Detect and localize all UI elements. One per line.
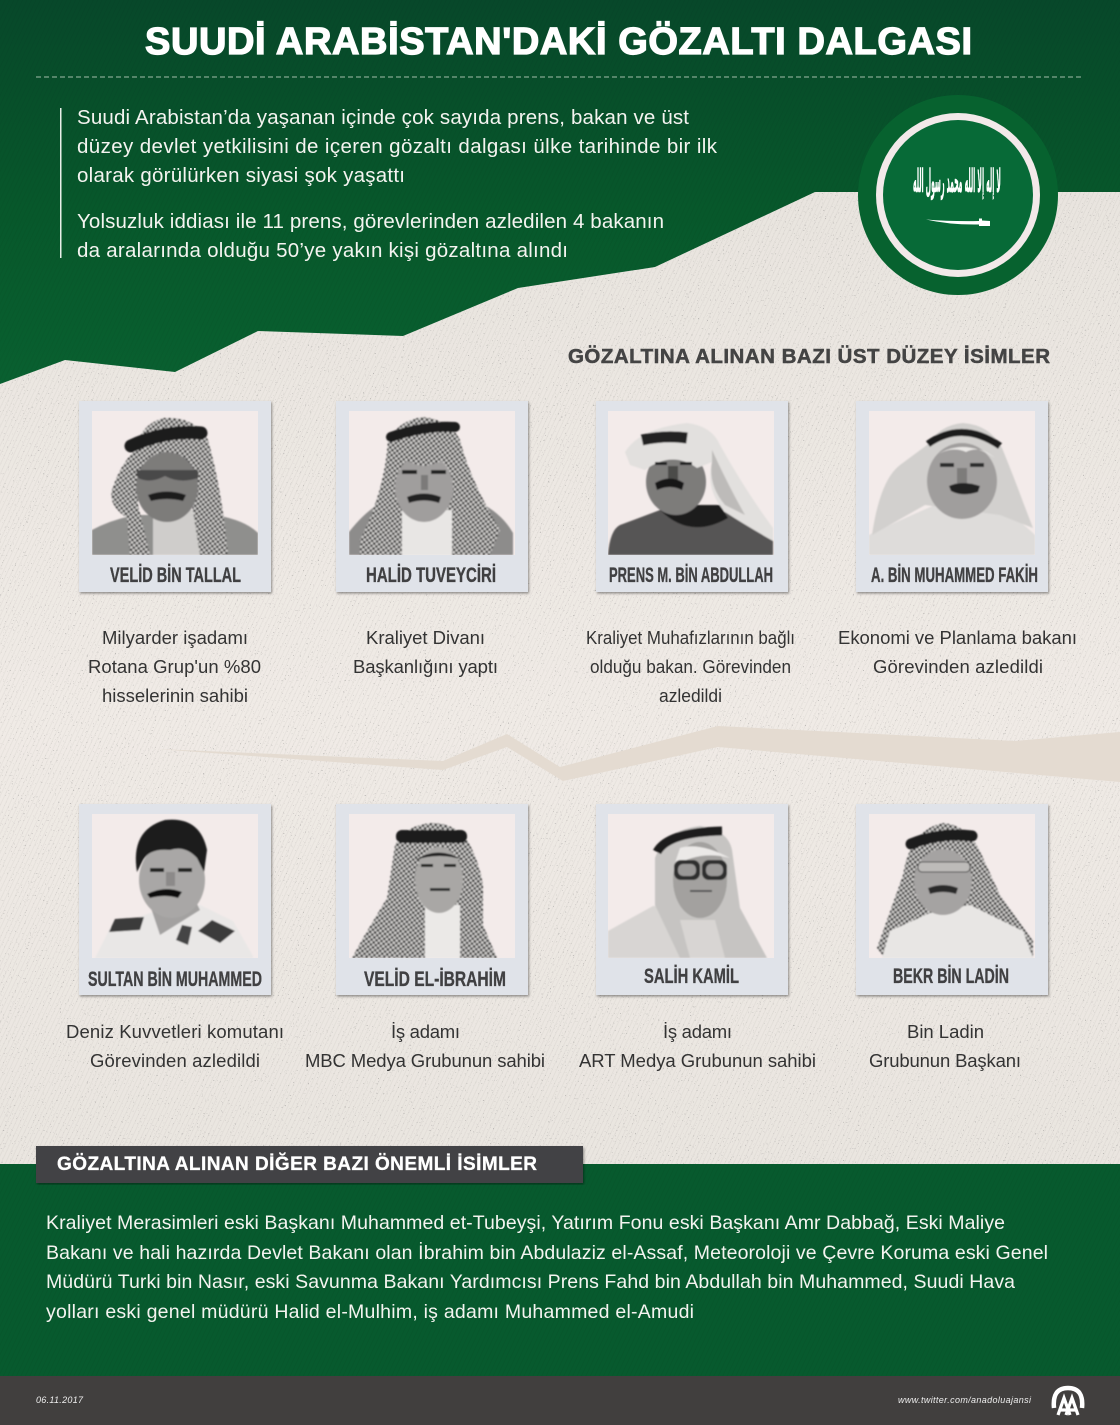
description: Salih Kamil: ART Medya Grubunun sahibi	[579, 1050, 816, 1071]
other names text: Müdürü Turki bin Nasır, eski Savunma Bakanı Yardımcısı Prens Fahd bin Abdullah bin Muhammed, Suudi Hava	[46, 1271, 1015, 1293]
intro text: Suudi Arabistan’da yaşanan içinde çok sayıda prens, bakan ve üst	[77, 106, 689, 129]
description: Prens M. bin Abdullah: azledildi	[659, 685, 722, 706]
card: Velid bin Tallal: VELİD BİN TALLAL	[110, 564, 241, 587]
portrait: Salih Kamil	[608, 826, 767, 958]
title divider	[36, 76, 1081, 78]
other names text: yolları eski genel müdürü Halid el-Mulhim, iş adamı Muhammed el-Amudi	[46, 1301, 694, 1323]
icon: Anadolu Agency logo	[1054, 1388, 1082, 1415]
other names text: Kraliyet Merasimleri eski Başkanı Muhammed et-Tubeyşi, Yatırım Fonu eski Başkanı Amr Dabbağ, Eski Maliye	[46, 1212, 1005, 1234]
card: Sultan bin Muhammed	[79, 804, 271, 995]
description: Prens M. bin Abdullah: olduğu bakan. Görevinden	[590, 656, 791, 677]
description: Salih Kamil: İş adamı	[663, 1021, 732, 1042]
description: Velid bin Tallal: hisselerinin sahibi	[102, 685, 248, 706]
description: Velid el-Ibrahim	[305, 1021, 545, 1071]
description: Halid Tuveyciri	[353, 627, 498, 677]
description: Halid Tuveyciri: Kraliyet Divanı	[366, 627, 485, 648]
card: Velid el-Ibrahim	[336, 804, 528, 995]
description: Bekr bin Ladin	[869, 1021, 1021, 1071]
footer	[0, 1376, 1120, 1425]
description: Velid el-Ibrahim: MBC Medya Grubunun sahibi	[305, 1050, 545, 1071]
portrait: Bekr bin Ladin	[877, 823, 1033, 958]
card: Velid el-Ibrahim: VELİD EL-İBRAHİM	[364, 968, 506, 991]
panel: other names	[0, 1146, 1120, 1376]
banner heading	[36, 1146, 583, 1183]
card: A. bin Muhammed Fakih	[856, 401, 1048, 592]
description: Velid bin Tallal: Rotana Grup'un %80	[88, 656, 261, 677]
description: Velid bin Tallal	[88, 627, 261, 706]
other names text: Bakanı ve hali hazırda Devlet Bakanı olan İbrahim bin Abdulaziz el-Assaf, Meteoroloji ve Çevre Koruma eski Genel	[46, 1241, 1048, 1264]
green header shape	[0, 0, 1120, 384]
description: Sultan bin Muhammed	[66, 1021, 284, 1071]
description: Bekr bin Ladin: Bin Ladin	[907, 1021, 984, 1042]
intro text: Yolsuzluk iddiası ile 11 prens, görevlerinden azledilen 4 bakanın	[77, 210, 664, 233]
card: Velid bin Tallal	[79, 401, 271, 592]
description: Halid Tuveyciri: Başkanlığını yaptı	[353, 656, 498, 677]
title: SUUDİ ARABİSTAN'DAKİ GÖZALTI DALGASI	[145, 20, 972, 63]
date: 06.11.2017	[36, 1395, 84, 1405]
intro text	[60, 106, 718, 262]
intro text: düzey devlet yetkilisini de içeren gözaltı dalgası ülke tarihinde bir ilk	[77, 135, 718, 158]
description: Sultan bin Muhammed: Görevinden azledildi	[90, 1050, 260, 1071]
description: Prens M. bin Abdullah: Kraliyet Muhafızlarının bağlı	[586, 627, 795, 648]
portrait: Velid el-Ibrahim	[352, 823, 497, 958]
card: Halid Tuveyciri: HALİD TUVEYCİRİ	[366, 564, 496, 587]
portrait: Velid bin Tallal	[92, 418, 258, 555]
description: Velid el-Ibrahim: İş adamı	[391, 1021, 460, 1042]
description: A. bin Muhammed Fakih: Görevinden azledildi	[873, 656, 1043, 677]
portrait: A. bin Muhammed Fakih	[869, 423, 1035, 555]
card: Sultan bin Muhammed: SULTAN BİN MUHAMMED	[88, 968, 262, 991]
icon: Saudi flag badge	[858, 95, 1058, 295]
card: Prens M. bin Abdullah	[596, 401, 788, 592]
description: Velid bin Tallal: Milyarder işadamı	[102, 627, 248, 648]
card: Prens M. bin Abdullah: PRENS M. BİN ABDULLAH	[609, 564, 773, 587]
card: Salih Kamil: SALİH KAMİL	[644, 965, 739, 988]
background swoosh	[157, 726, 1120, 782]
intro text: olarak görülürken siyasi şok yaşattı	[77, 164, 405, 187]
description: A. bin Muhammed Fakih: Ekonomi ve Planlama bakanı	[838, 627, 1077, 648]
card: Bekr bin Ladin	[856, 804, 1048, 995]
banner heading: GÖZALTINA ALINAN DİĞER BAZI ÖNEMLİ İSİMLER	[57, 1153, 537, 1175]
description: Sultan bin Muhammed: Deniz Kuvvetleri komutanı	[66, 1021, 284, 1042]
description: Prens M. bin Abdullah	[586, 627, 795, 706]
description: Bekr bin Ladin: Grubunun Başkanı	[869, 1050, 1021, 1071]
description: A. bin Muhammed Fakih	[838, 627, 1077, 677]
intro text: da aralarında olduğu 50’ye yakın kişi gözaltına alındı	[77, 239, 568, 262]
section heading: GÖZALTINA ALINAN BAZI ÜST DÜZEY İSİMLER	[568, 345, 1050, 368]
other names text	[46, 1212, 1048, 1323]
portrait: Sultan bin Muhammed	[95, 820, 253, 958]
description: Salih Kamil	[579, 1021, 816, 1071]
portrait: Prens M. bin Abdullah	[608, 423, 773, 555]
portrait: Halid Tuveyciri	[349, 417, 513, 555]
card: Bekr bin Ladin: BEKR BİN LADİN	[893, 965, 1009, 988]
card: Salih Kamil	[596, 804, 788, 995]
source link: www.twitter.com/anadoluajansi	[898, 1395, 1032, 1405]
card: Halid Tuveyciri	[336, 401, 528, 592]
